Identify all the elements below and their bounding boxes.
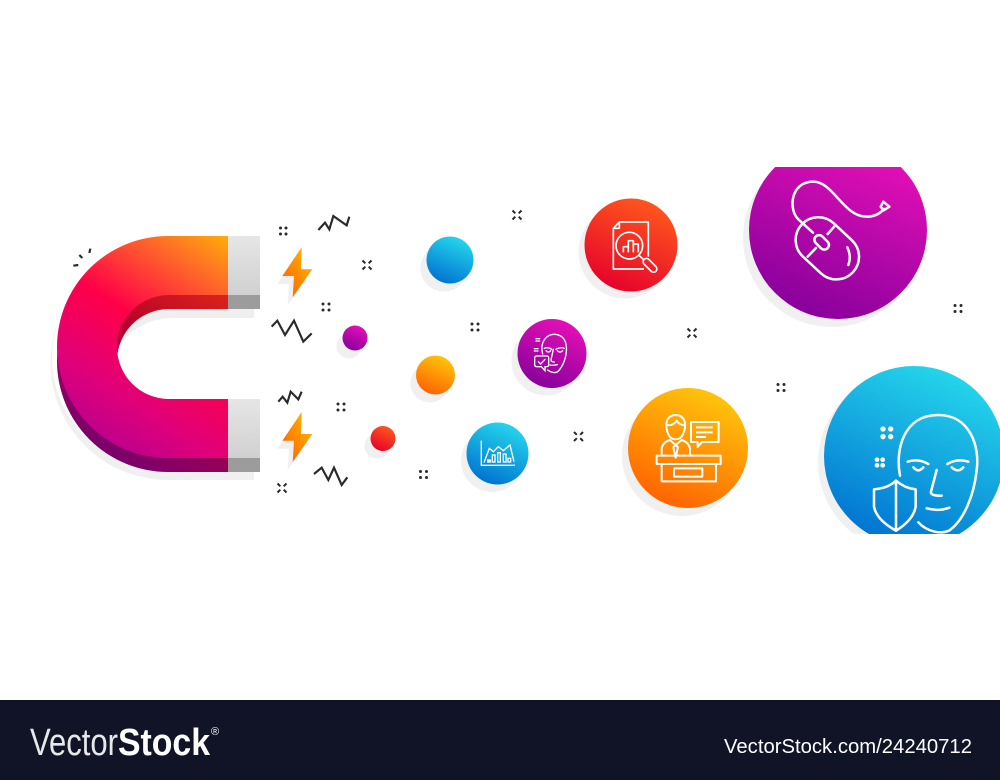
footer banner (0, 700, 1000, 780)
icon: face with check bubble (534, 334, 566, 373)
icon: document with magnifier (613, 222, 658, 274)
circle: small blue (420, 236, 474, 292)
image id: VectorStock.com/24240712 (724, 736, 972, 758)
sparks and zigzags (73, 216, 349, 485)
logo: ® (211, 726, 219, 738)
icon: receptionist at desk (657, 415, 721, 481)
decorative x marks (278, 210, 696, 492)
circle: mouse icon (743, 167, 927, 327)
logo: Stock (118, 722, 211, 764)
magnet tips (228, 236, 260, 472)
circle: receptionist icon (622, 388, 748, 516)
icon: computer mouse (786, 182, 889, 289)
magnet shadow (50, 245, 254, 480)
logo: Vector (30, 722, 118, 764)
circle: report search icon (578, 198, 678, 298)
circle: line chart icon (461, 422, 528, 492)
logo (30, 722, 219, 764)
magnet body (57, 236, 228, 458)
circle: face check icon (512, 319, 586, 396)
icon: face with shield (874, 415, 977, 532)
lightning bolts (277, 247, 312, 470)
circle: small orange (410, 356, 455, 402)
circle: small purple (336, 326, 368, 358)
magnet (50, 236, 260, 480)
icon: line chart (481, 441, 515, 465)
magnet side wall (57, 250, 228, 472)
circle: face protection icon (818, 366, 1000, 552)
decorative dot clusters (279, 226, 962, 479)
circle: small red (364, 426, 396, 458)
